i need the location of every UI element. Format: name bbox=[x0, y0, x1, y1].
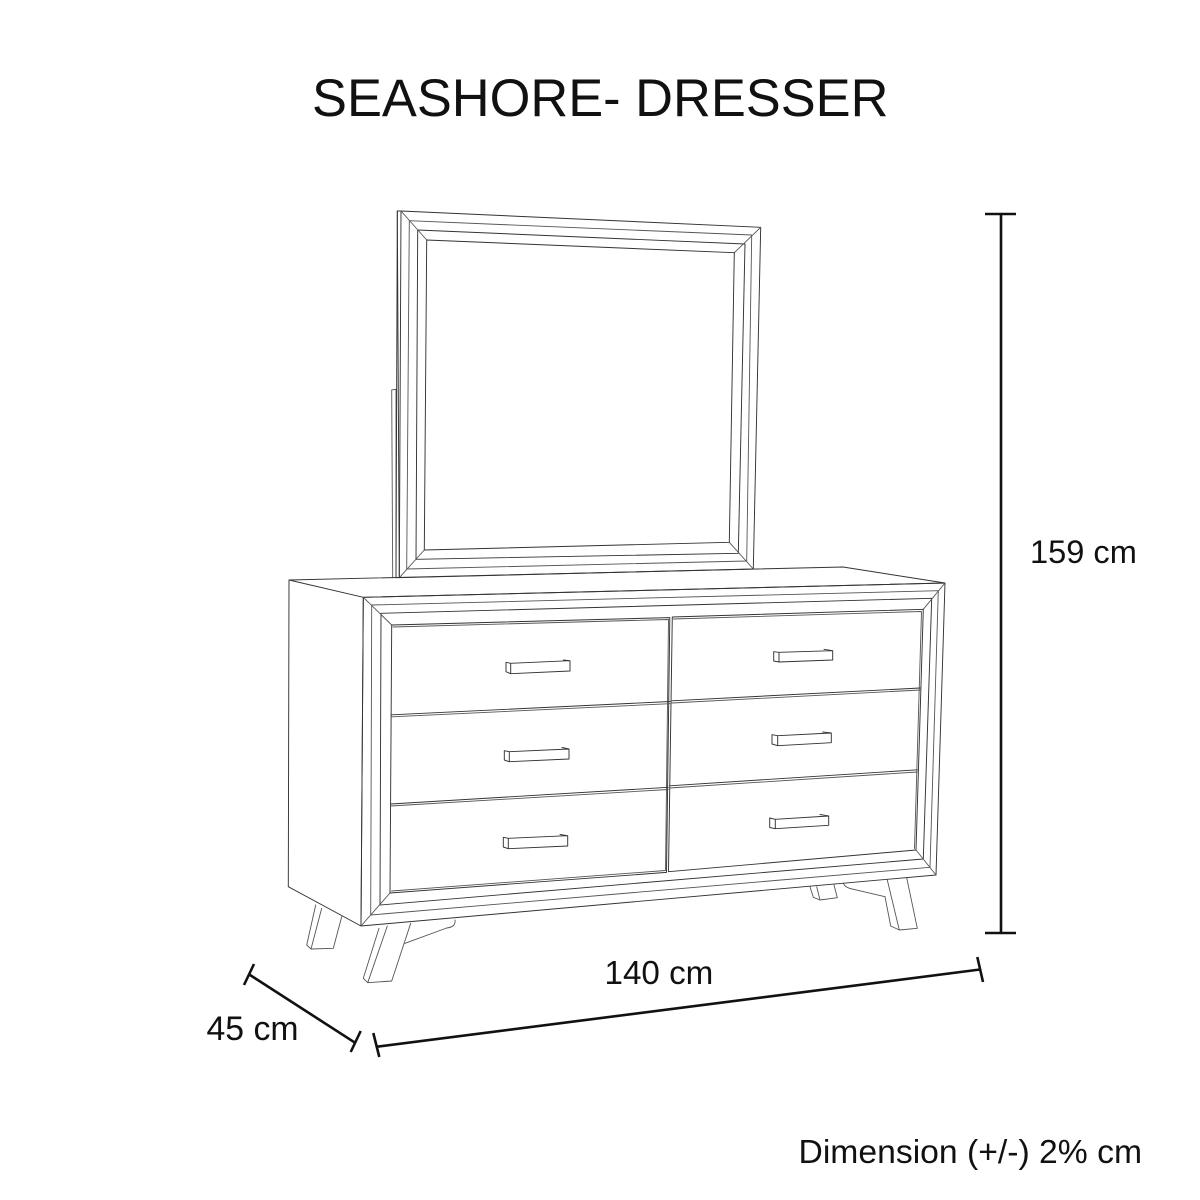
handle: top left bbox=[506, 660, 570, 674]
front legs bbox=[363, 878, 917, 983]
depth label: 45 cm bbox=[206, 1010, 299, 1048]
handle: middle right bbox=[772, 732, 831, 746]
width label: 140 cm bbox=[604, 955, 713, 992]
mirror frame bbox=[396, 211, 761, 578]
left drawers outline bbox=[390, 618, 670, 893]
back legs and brace bbox=[307, 883, 885, 949]
right drawers outline bbox=[668, 609, 923, 872]
handle: bottom left bbox=[503, 834, 568, 849]
height dimension line bbox=[985, 214, 1016, 933]
handle: bottom right bbox=[770, 814, 829, 829]
mirror glass bbox=[424, 240, 734, 550]
drawer dividers bbox=[391, 688, 920, 804]
handle: middle left bbox=[504, 748, 569, 762]
mirror support post bbox=[392, 389, 396, 578]
drawers bbox=[390, 609, 923, 893]
handle: top right bbox=[774, 649, 833, 662]
height label: 159 cm bbox=[1030, 533, 1137, 570]
dresser top and side bbox=[288, 567, 945, 926]
tolerance note: Dimension (+/-) 2% cm bbox=[798, 1133, 1142, 1171]
title: SEASHORE- DRESSER bbox=[312, 70, 888, 128]
dresser front frame bbox=[361, 583, 945, 926]
dresser with mirror line drawing bbox=[288, 211, 945, 983]
width dimension line bbox=[373, 957, 983, 1057]
mirror bbox=[392, 211, 761, 578]
depth dimension line bbox=[244, 964, 361, 1052]
drawer handles bbox=[503, 649, 833, 849]
